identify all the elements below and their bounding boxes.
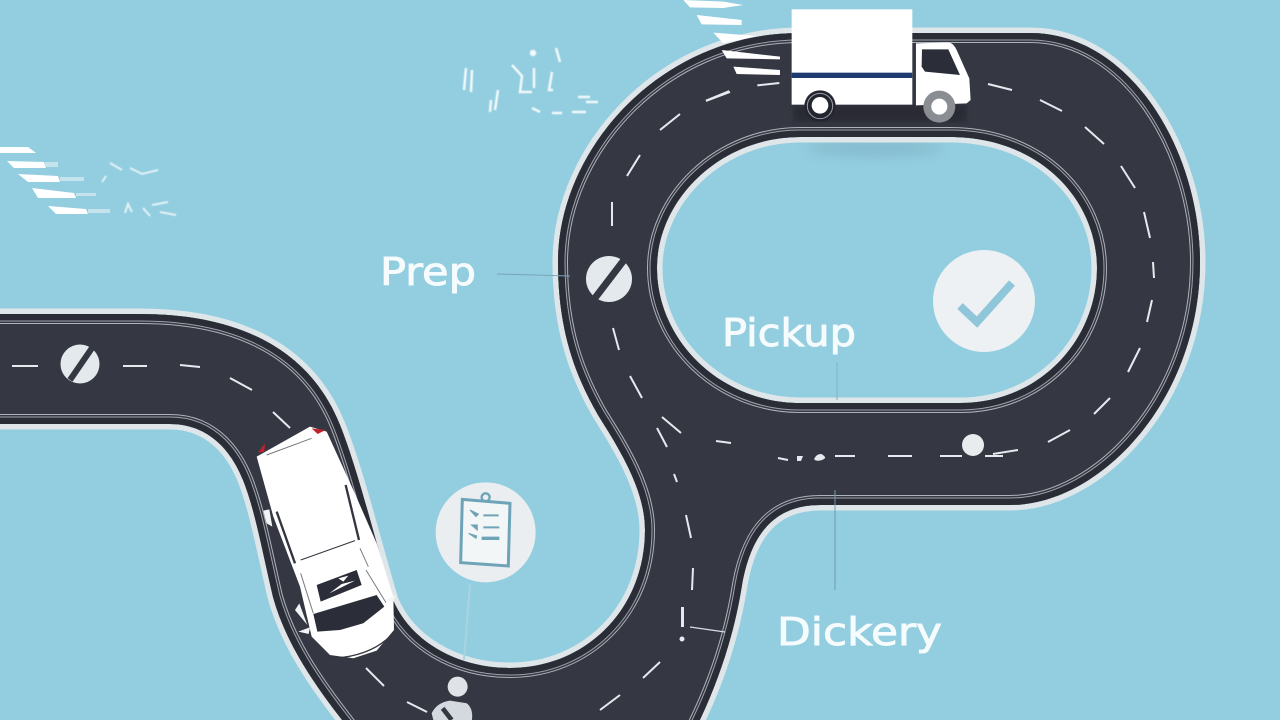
rear wheel <box>804 90 836 122</box>
window glint <box>329 576 355 593</box>
tail lights <box>258 428 326 453</box>
leader line: clipboard <box>464 584 470 660</box>
white car <box>257 427 396 658</box>
speed lines behind truck <box>683 0 780 101</box>
blue stripe <box>792 73 912 78</box>
cab <box>916 42 971 105</box>
scattered marks: left <box>102 163 176 216</box>
rear window <box>317 570 362 602</box>
scattered marks: top <box>464 48 598 113</box>
label: Pickup: Pickup <box>722 311 856 355</box>
centre lane dashes <box>12 84 1154 712</box>
mirrors <box>263 509 396 634</box>
label: Prep: Prep <box>380 250 476 294</box>
car body <box>257 427 394 658</box>
cargo box <box>792 9 912 105</box>
clipboard icon <box>461 493 510 566</box>
truck shadow <box>793 105 967 122</box>
road marker: prep <box>586 256 632 302</box>
cab window <box>922 49 960 75</box>
delivery truck <box>792 9 971 123</box>
leader line: pickup <box>836 362 838 400</box>
leader line: dickery <box>834 490 836 590</box>
road marker: left <box>60 344 100 384</box>
leader line: prep <box>497 274 570 276</box>
label: Dickery: Dickery <box>777 610 942 654</box>
check mark <box>960 283 1012 322</box>
shadow under truck <box>805 140 945 156</box>
clipboard badge <box>436 482 536 582</box>
front wheel <box>923 91 955 123</box>
road marker: white dot <box>962 434 984 456</box>
check badge <box>933 250 1035 352</box>
speed lines: left <box>0 147 110 214</box>
person icon on road <box>432 677 472 720</box>
car details <box>267 438 394 658</box>
small road marks <box>680 454 825 642</box>
windshield <box>313 595 384 632</box>
